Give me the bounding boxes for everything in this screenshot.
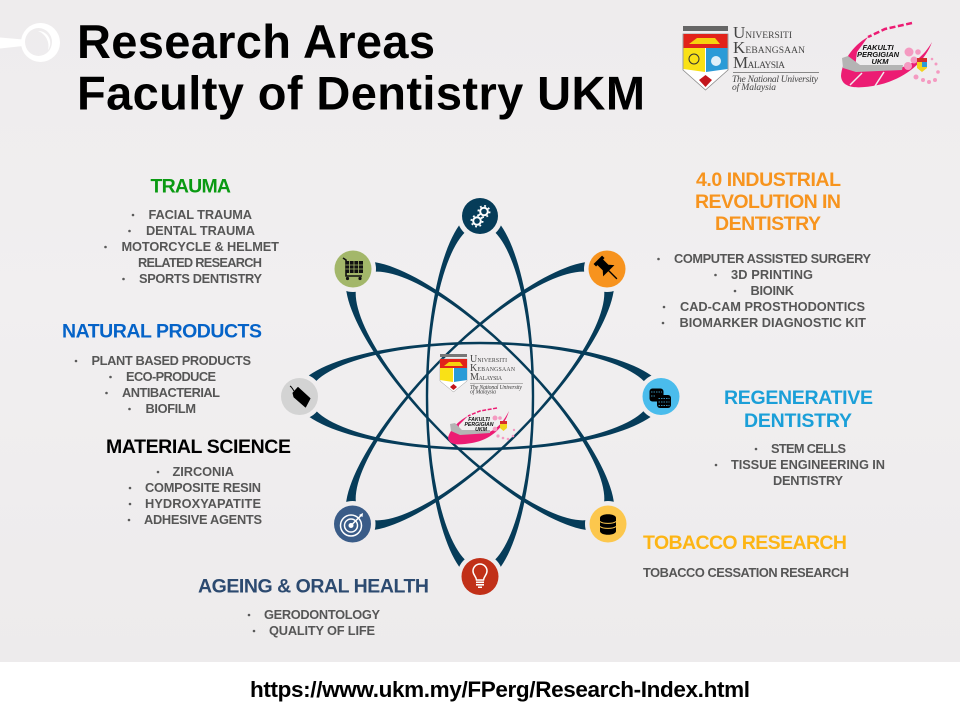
orbit: vertical (426, 211, 534, 581)
orbit: diagonal down (346, 262, 614, 530)
list: material science topics: ZIRCONIA (172, 464, 234, 479)
heading: regenerative dentistry (724, 387, 873, 432)
panel: material science (106, 436, 291, 527)
logo: Fakulti Pergigian UKM (header) (841, 23, 940, 87)
panel: regenerative dentistry (715, 387, 885, 488)
list: trauma topics (104, 207, 279, 286)
list: ageing topics (248, 607, 380, 638)
decorative keyhole ornament (0, 23, 60, 62)
list: material science topics: COMPOSITE RESIN (145, 480, 261, 495)
list: industrial revolution topics: BIOINK (750, 283, 795, 298)
list: regenerative topics: STEM CELLS (771, 441, 846, 456)
heading: ageing and oral health: AGEING & ORAL HEALTH (198, 576, 429, 598)
panel: 4.0 industrial revolution (657, 169, 871, 330)
logo: Universiti Kebangsaan Malaysia (header): UNIVERSITI (733, 23, 792, 42)
atom orbits (308, 226, 652, 567)
heading: material science: MATERIAL SCIENCE (106, 436, 291, 458)
list: natural products topics: ANTIBACTERIAL (122, 385, 220, 400)
logo: Universiti Kebangsaan Malaysia (centre) (440, 354, 523, 396)
icon: target (334, 506, 371, 542)
logo: Universiti Kebangsaan Malaysia (header): KEBANGSAAN (733, 38, 805, 57)
logo: Universiti Kebangsaan Malaysia (header) (683, 23, 819, 93)
icon: coins (642, 378, 680, 415)
panel: natural products (62, 320, 262, 416)
heading: 4.0 industrial revolution: REVOLUTION IN (695, 191, 841, 213)
logo: Universiti Kebangsaan Malaysia (centre): MALAYSIA (470, 372, 503, 383)
icon: database (590, 506, 626, 542)
list: trauma topics: MOTORCYCLE & HELMET (122, 239, 279, 254)
logo: Universiti Kebangsaan Malaysia (centre): UNIVERSITI (470, 354, 507, 365)
footer band (0, 662, 960, 720)
heading: tobacco research: TOBACCO RESEARCH (643, 532, 847, 554)
list: natural products topics (75, 353, 251, 416)
heading: 4.0 industrial revolution: 4.0 INDUSTRIAL (696, 169, 841, 191)
heading: 4.0 industrial revolution (695, 169, 841, 235)
logo: Universiti Kebangsaan Malaysia (header): of Malaysia (732, 82, 776, 93)
list: natural products topics: BIOFILM (146, 401, 196, 416)
list: material science topics: HYDROXYAPATITE (145, 496, 261, 511)
logo: Fakulti Pergigian UKM (header): UKM (871, 57, 889, 66)
icon: push pin (588, 250, 626, 288)
list: industrial revolution topics: 3D PRINTING (731, 267, 813, 282)
logo: Universiti Kebangsaan Malaysia (header): The National University (732, 75, 819, 85)
list: industrial revolution topics: COMPUTER ASSISTED SURGERY (674, 251, 871, 266)
logo: Fakulti Pergigian UKM (centre): UKM (475, 427, 488, 433)
list: trauma topics: FACIAL TRAUMA (148, 207, 252, 222)
list: material science topics (128, 464, 262, 527)
logo: Universiti Kebangsaan Malaysia (header): MALAYSIA (733, 53, 785, 72)
logo: Fakulti Pergigian UKM (header): PERGIGIAN (857, 50, 900, 59)
list: industrial revolution topics: CAD-CAM PROSTHODONTICS (680, 299, 865, 314)
icon: price tag (281, 378, 318, 415)
list: industrial revolution topics (657, 251, 871, 330)
text: tobacco topic: TOBACCO CESSATION RESEARCH (643, 565, 849, 580)
title (77, 15, 645, 120)
list: regenerative topics (715, 441, 885, 488)
list: material science topics: ADHESIVE AGENTS (144, 512, 262, 527)
panel: ageing and oral health (198, 576, 429, 638)
list: regenerative topics: TISSUE ENGINEERING IN (731, 457, 885, 472)
panel: tobacco research (643, 532, 849, 580)
list: trauma topics: RELATED RESEARCH (138, 255, 262, 270)
logo: Fakulti Pergigian UKM (centre): PERGIGIAN (464, 422, 494, 428)
heading: regenerative dentistry: DENTISTRY (744, 410, 852, 432)
icon: shopping cart (334, 250, 372, 288)
logo: Fakulti Pergigian UKM (header): FAKULTI (862, 43, 894, 52)
logo: Universiti Kebangsaan Malaysia (centre): of Malaysia (470, 388, 496, 396)
title: Faculty of Dentistry UKM (77, 66, 645, 120)
orbit: horizontal (295, 342, 665, 450)
logo: Fakulti Pergigian UKM (centre): FAKULTI (468, 417, 490, 423)
list: industrial revolution topics: BIOMARKER DIAGNOSTIC KIT (680, 315, 866, 330)
heading: 4.0 industrial revolution: DENTISTRY (715, 213, 821, 235)
list: regenerative topics: DENTISTRY (773, 473, 843, 488)
heading: natural products: NATURAL PRODUCTS (62, 320, 262, 342)
list: trauma topics: SPORTS DENTISTRY (139, 271, 262, 286)
orbit: diagonal up (346, 262, 614, 530)
panel: trauma (104, 176, 279, 286)
list: ageing topics: QUALITY OF LIFE (269, 623, 375, 638)
icon: gears (462, 198, 498, 234)
icon: light bulb (462, 558, 498, 595)
list: natural products topics: PLANT BASED PRODUCTS (92, 353, 251, 368)
heading: trauma: TRAUMA (150, 176, 231, 198)
logo: Universiti Kebangsaan Malaysia (centre): KEBANGSAAN (470, 363, 516, 374)
logo: Fakulti Pergigian UKM (centre) (448, 408, 515, 444)
title: Research Areas (77, 15, 435, 68)
list: ageing topics: GERODONTOLOGY (264, 607, 380, 622)
logo: Universiti Kebangsaan Malaysia (centre): The National University (470, 385, 522, 391)
heading: regenerative dentistry: REGENERATIVE (724, 387, 873, 409)
list: trauma topics: DENTAL TRAUMA (146, 223, 255, 238)
footer link text: https://www.ukm.my/FPerg/Research-Index.html (250, 677, 750, 702)
list: natural products topics: ECO-PRODUCE (126, 369, 216, 384)
